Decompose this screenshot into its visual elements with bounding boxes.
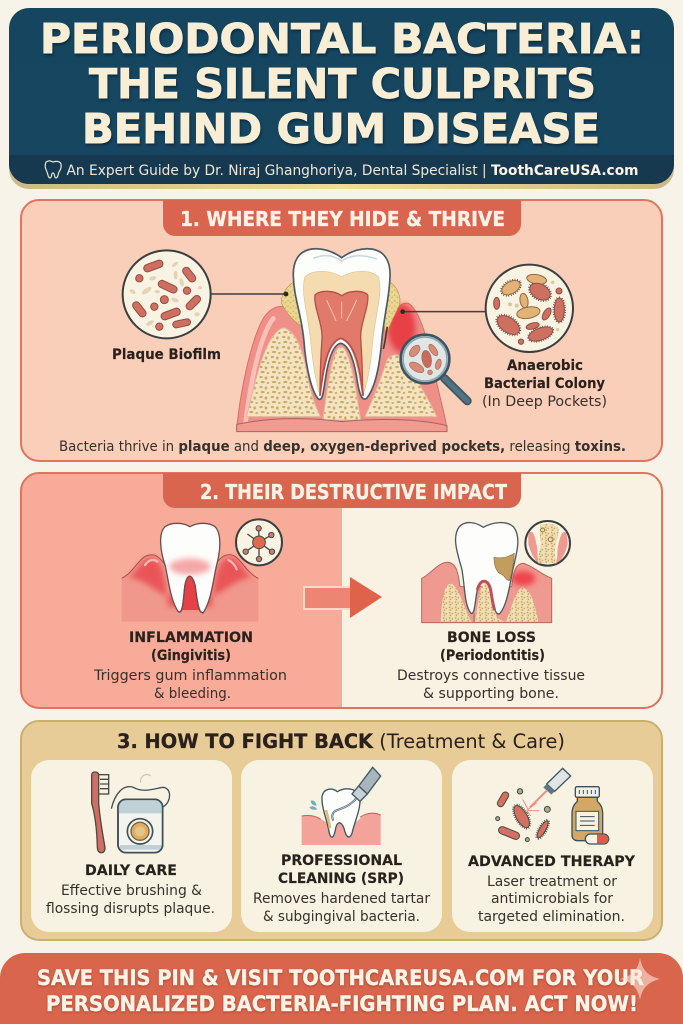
- card: professional cleaning: PROFESSIONAL: [281, 853, 402, 869]
- subtitle: An Expert Guide by Dr. Niraj Ghanghoriya, Dental Specialist | ToothCareUSA.com: [66, 163, 638, 179]
- card: advanced therapy: ADVANCED THERAPY: [468, 854, 635, 870]
- inflamed pocket: [388, 304, 416, 352]
- colony circle: [486, 265, 573, 352]
- label: bone loss: BONE LOSS: [447, 630, 536, 646]
- label: bone loss: (Periodontitis): [440, 648, 545, 664]
- icon: inflammation molecule: [236, 519, 282, 565]
- plaque and tartar: [281, 282, 306, 328]
- label: bone loss: & supporting bone.: [423, 686, 559, 702]
- alveolar bone: [247, 328, 321, 417]
- section heading 1: 1. WHERE THEY HIDE & THRIVE: [180, 207, 505, 231]
- panel: how to fight back: [21, 721, 662, 940]
- label: plaque biofilm: Plaque Biofilm: [112, 347, 221, 363]
- icon: plaque biofilm circle: [123, 250, 211, 338]
- tooth: [161, 523, 220, 613]
- pulp chamber: [315, 291, 368, 396]
- title: [40, 15, 644, 153]
- label: anaerobic colony: (In Deep Pockets): [482, 394, 607, 410]
- call to action banner: SAVE THIS PIN & VISIT TOOTHCAREUSA.COM FOR YOUR: [37, 966, 644, 990]
- card: professional cleaning: Removes hardened tartar: [253, 891, 430, 907]
- call to action banner: PERSONALIZED BACTERIA-FIGHTING PLAN. ACT NOW!: [46, 992, 638, 1016]
- card: advanced therapy: Laser treatment or: [487, 874, 617, 890]
- illustration: bone loss: [422, 523, 552, 623]
- call to action banner: [0, 953, 683, 1024]
- title: BEHIND GUM DISEASE: [82, 105, 600, 153]
- bottom tissue band: [237, 419, 447, 432]
- label: inflammation: Triggers gum inflammation: [93, 668, 287, 684]
- card: advanced therapy: [452, 760, 653, 932]
- header banner: [9, 8, 674, 189]
- connector line: colony: [400, 309, 485, 314]
- label: inflammation: [93, 630, 287, 702]
- title: THE SILENT CULPRITS: [89, 60, 596, 108]
- label: inflammation: INFLAMMATION: [129, 630, 253, 646]
- caption: bacteria thrive: Bacteria thrive in plaque and deep, oxygen-deprived pockets, releasing toxins.: [59, 439, 626, 455]
- label: anaerobic colony: Bacterial Colony: [484, 376, 605, 392]
- card: daily care: Effective brushing &: [61, 883, 202, 899]
- magnifying glass: [401, 335, 467, 401]
- icon: sparkle: [620, 958, 660, 1000]
- icon: toothbrush and floss: [92, 772, 170, 853]
- card: daily care: flossing disrupts plaque.: [46, 901, 215, 917]
- panel: where they hide and thrive: [21, 200, 662, 461]
- card: professional cleaning: [241, 760, 442, 932]
- label: bone loss: [397, 630, 585, 702]
- gum tissue: [237, 303, 447, 429]
- card: advanced therapy: targeted elimination.: [478, 909, 625, 925]
- illustration: inflamed gum and tooth: [122, 523, 258, 622]
- card: daily care: DAILY CARE: [85, 863, 177, 879]
- dentin: [303, 271, 380, 396]
- section heading 2: 2. THEIR DESTRUCTIVE IMPACT: [200, 480, 507, 504]
- card: daily care: [31, 760, 232, 932]
- arrow: progression: [304, 577, 382, 618]
- icon: scaler on tooth: [302, 767, 381, 845]
- tooth outline: [293, 249, 390, 399]
- icon: bone loss detail: [525, 521, 570, 566]
- label: inflammation: (Gingivitis): [151, 648, 231, 664]
- section heading 2: [163, 473, 521, 508]
- label: bone loss: Destroys connective tissue: [397, 668, 585, 684]
- icon: laser and medicine: [496, 768, 609, 844]
- card: professional cleaning: & subgingival bacteria.: [263, 909, 420, 925]
- connector line: plaque: [211, 292, 288, 296]
- card: professional cleaning: CLEANING (SRP): [278, 871, 404, 887]
- icon: small tooth: [45, 161, 61, 178]
- title: PERIODONTAL BACTERIA:: [40, 15, 644, 63]
- tooth: [456, 523, 518, 614]
- label: anaerobic colony: Anaerobic: [507, 358, 583, 374]
- section heading 3: 3. HOW TO FIGHT BACK (Treatment & Care): [117, 730, 565, 753]
- label: anaerobic colony: [482, 358, 607, 410]
- label: inflammation: & bleeding.: [154, 686, 231, 702]
- section heading 1: [163, 200, 521, 236]
- card: advanced therapy: antimicrobials for: [491, 891, 613, 907]
- tooth cross-section illustration: [237, 249, 447, 432]
- icon: anaerobic colony and magnifier: [400, 265, 573, 401]
- panel: destructive impact: [21, 473, 662, 708]
